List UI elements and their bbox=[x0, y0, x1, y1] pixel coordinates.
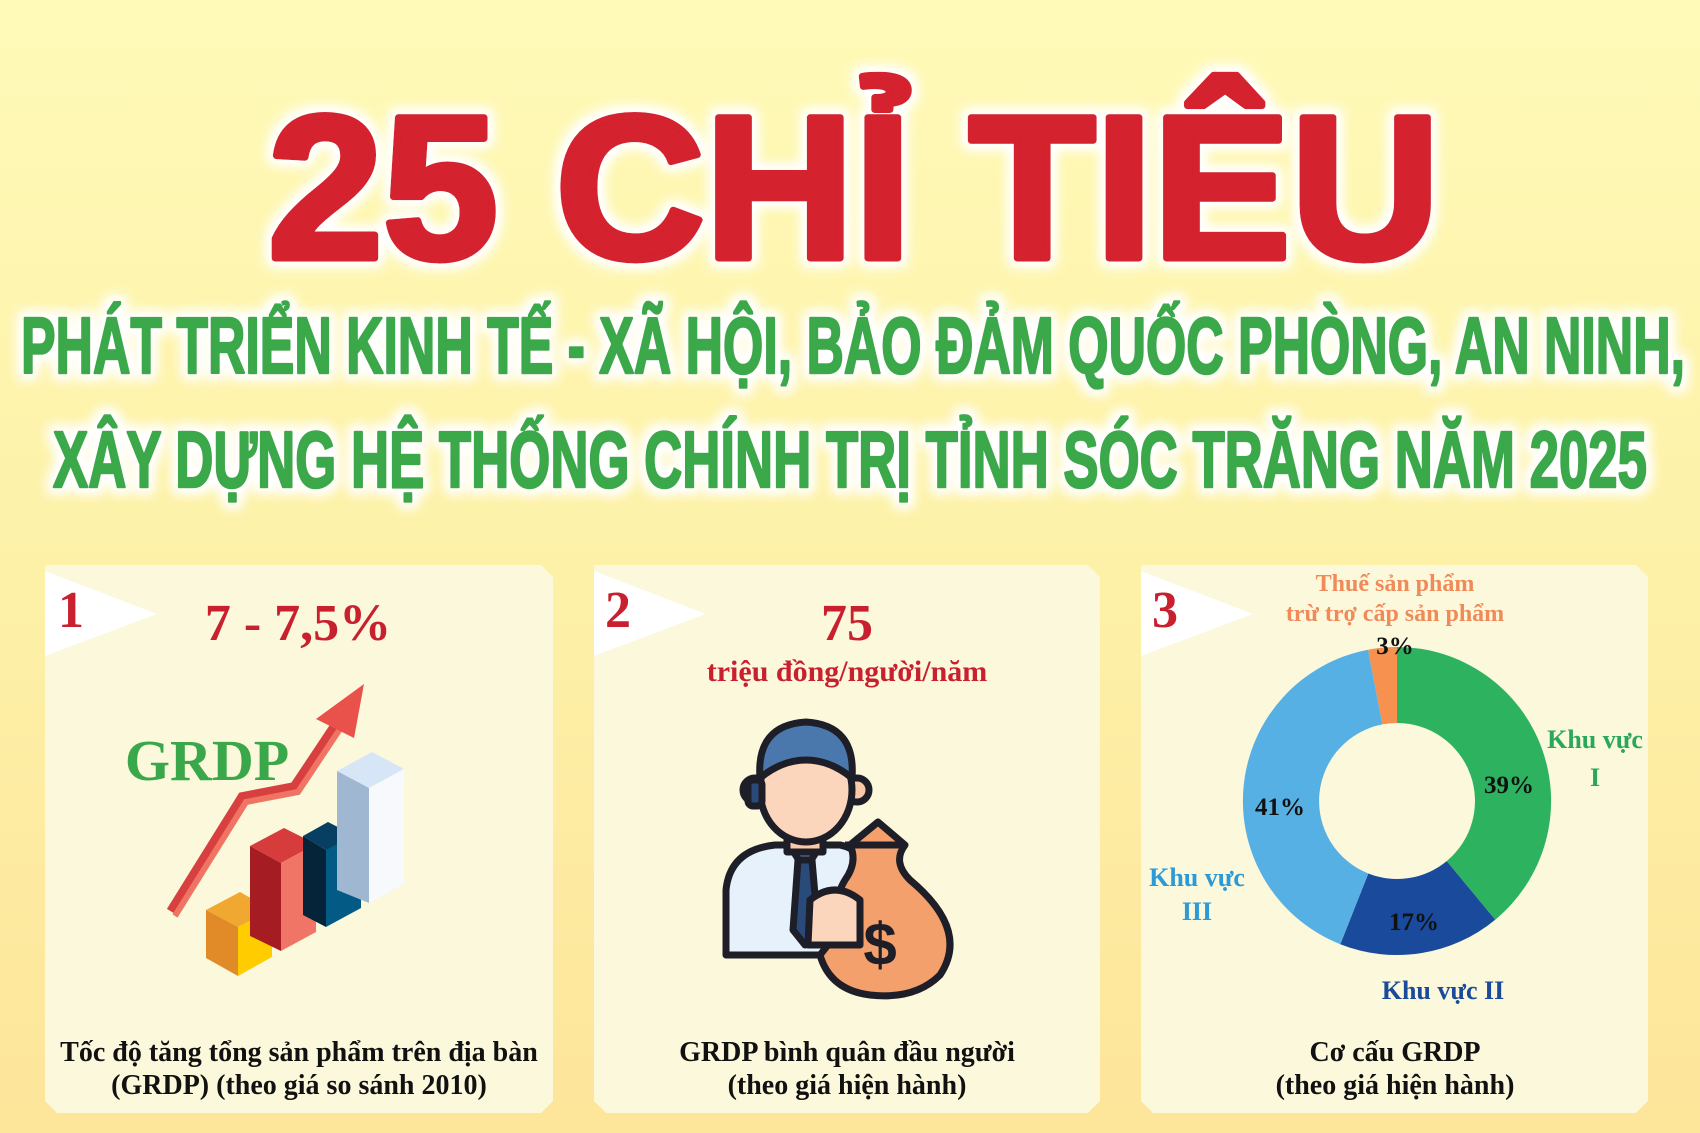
value 75: 75 bbox=[821, 595, 873, 652]
sector labels: I bbox=[1590, 763, 1600, 792]
sector labels bbox=[1149, 725, 1643, 1005]
caption: GRDP bình quân đầu người bbox=[679, 1037, 1015, 1068]
percentages: 41% bbox=[1255, 794, 1305, 821]
sector labels: Khu vực II bbox=[1382, 976, 1504, 1005]
number badge 2 bbox=[594, 571, 706, 656]
number badge 1 bbox=[45, 571, 157, 656]
number badge 3: 3 bbox=[1152, 582, 1178, 639]
label GRDP: GRDP bbox=[125, 728, 289, 793]
unit: triệu đồng/người/năm bbox=[707, 655, 987, 688]
legend: tax label: trừ trợ cấp sản phẩm bbox=[1286, 601, 1504, 627]
icon: person with money bag bbox=[726, 722, 950, 996]
percentages bbox=[1255, 633, 1534, 936]
title: 25 CHỈ TIÊU bbox=[268, 74, 1440, 302]
number badge 2: 2 bbox=[605, 582, 631, 639]
number badge 3 bbox=[1141, 571, 1253, 656]
panel: GRDP growth bbox=[45, 565, 553, 1113]
percentages: 39% bbox=[1484, 772, 1534, 799]
value 7 - 7,5%: 7 - 7,5% bbox=[205, 595, 391, 652]
caption: (theo giá hiện hành) bbox=[728, 1070, 966, 1101]
sector labels: Khu vực bbox=[1149, 863, 1245, 892]
caption: (GRDP) (theo giá so sánh 2010) bbox=[111, 1070, 487, 1101]
caption: Tốc độ tăng tổng sản phẩm trên địa bàn bbox=[60, 1037, 538, 1068]
caption: (theo giá hiện hành) bbox=[1276, 1070, 1514, 1101]
icon: person with money bag: $ bbox=[863, 911, 897, 978]
panel: GRDP structure bbox=[1141, 565, 1648, 1113]
chart: rising arrow and bars bbox=[172, 684, 404, 976]
caption: Cơ cấu GRDP bbox=[1309, 1037, 1481, 1068]
subtitle bbox=[21, 301, 1685, 504]
number badge 1: 1 bbox=[58, 582, 84, 639]
donut chart bbox=[1243, 647, 1551, 955]
legend: tax label: Thuế sản phẩm bbox=[1316, 571, 1474, 597]
sector labels: Khu vực bbox=[1547, 725, 1643, 754]
percentages: 17% bbox=[1389, 909, 1439, 936]
sector labels: III bbox=[1182, 897, 1212, 926]
panel: GRDP per capita bbox=[594, 565, 1100, 1113]
percentages: 3% bbox=[1376, 633, 1414, 660]
